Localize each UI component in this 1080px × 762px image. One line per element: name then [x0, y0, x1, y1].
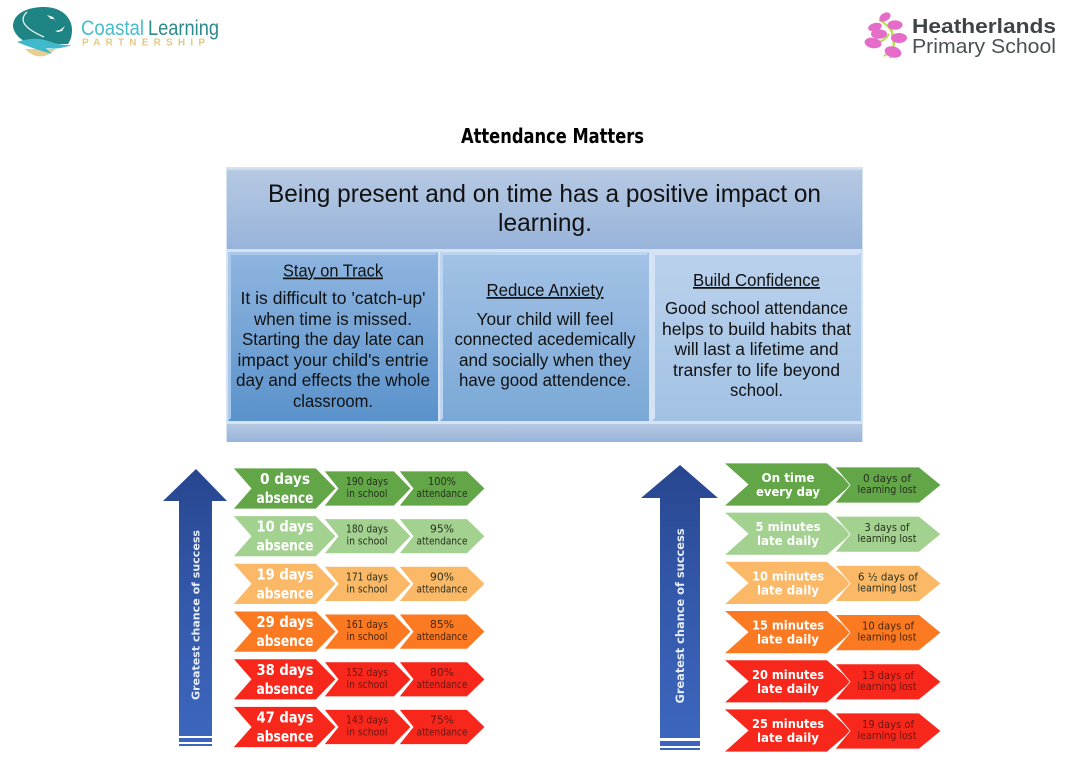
logo: Coastal Learning Partnership	[13, 7, 219, 56]
panel: Stay on Track	[228, 252, 438, 421]
panel: Reduce Anxiety: connected acedemically	[454, 329, 636, 349]
row: 25 minutes late daily	[724, 709, 941, 752]
panel: Build Confidence	[652, 252, 861, 421]
row: 10 days absence: in school	[346, 536, 388, 548]
row: 19 days absence	[233, 563, 485, 604]
row: 0 days absence	[233, 468, 485, 509]
panel heading	[227, 169, 862, 249]
row: 10 days absence: 10 days	[256, 518, 314, 536]
panel: Stay on Track: It is difficult to 'catch-up'	[240, 288, 426, 308]
row: 10 days absence: attendance	[416, 536, 468, 548]
row: 47 days absence: 47 days	[256, 708, 314, 726]
row: 29 days absence: 85%	[430, 619, 454, 631]
row: 25 minutes late daily: late daily	[757, 730, 819, 745]
row: 19 days absence: 90%	[430, 571, 454, 583]
logo: Coastal Learning Partnership: Learning	[148, 17, 219, 40]
row: 15 minutes late daily: late daily	[757, 632, 819, 647]
row: 38 days absence: 152 days	[346, 667, 388, 679]
row: 38 days absence: in school	[346, 679, 388, 691]
school name: Heatherlands	[912, 15, 1056, 38]
row: 25 minutes late daily: 19 days of	[862, 718, 915, 731]
row: 10 minutes late daily: 6 ½ days of	[858, 570, 919, 583]
row: 10 minutes late daily: late daily	[757, 582, 819, 597]
row: 10 days absence	[233, 516, 485, 557]
panel: Stay on Track: impact your child's entrie	[238, 350, 428, 370]
row: 19 days absence: in school	[346, 583, 388, 595]
row: on time every day: every day	[756, 484, 820, 499]
row: 0 days absence: absence	[256, 489, 314, 507]
row: 15 minutes late daily: 10 days of	[862, 620, 915, 633]
row: 29 days absence: attendance	[416, 631, 468, 643]
logo: Coastal Learning Partnership: PARTNERSHIP	[82, 38, 205, 48]
arrow: greatest chance of success (lateness): Greatest chance of success	[673, 528, 687, 704]
row: 38 days absence: attendance	[416, 679, 468, 691]
row: on time every day	[724, 463, 941, 506]
row: 10 minutes late daily	[724, 561, 941, 604]
row: 19 days absence: 19 days	[256, 565, 314, 583]
row: 19 days absence: absence	[256, 584, 314, 602]
logo: Heatherlands Primary School	[864, 11, 1056, 60]
panel footer bar	[227, 424, 862, 442]
panel: Stay on Track: Stay on Track	[283, 260, 383, 280]
arrow: greatest chance of success (lateness)	[641, 465, 718, 750]
row: 29 days absence: 161 days	[346, 619, 388, 631]
row: 47 days absence: 143 days	[346, 714, 388, 726]
title: Attendance Matters	[461, 124, 644, 148]
panel: Reduce Anxiety: and socially when they	[459, 350, 631, 370]
panel: Reduce Anxiety: Reduce Anxiety	[486, 280, 604, 300]
row: 25 minutes late daily: learning lost	[858, 729, 917, 742]
row: 0 days absence: in school	[346, 488, 388, 500]
panel: Build Confidence: transfer to life beyond	[673, 360, 840, 380]
row: on time every day: learning lost	[858, 483, 917, 496]
row: 20 minutes late daily: late daily	[757, 681, 819, 696]
row: 20 minutes late daily: 20 minutes	[752, 667, 824, 682]
panel: Stay on Track: Starting the day late can	[242, 329, 424, 349]
panel: Build Confidence: Build Confidence	[693, 270, 820, 290]
row: 29 days absence: 29 days	[256, 613, 314, 631]
icon: teal globe with waves and sand	[13, 7, 72, 56]
row: 5 minutes late daily: 3 days of	[864, 521, 910, 534]
row: on time every day: On time	[762, 470, 814, 485]
logo: Heatherlands Primary School: Primary School	[912, 36, 1056, 58]
panel: Reduce Anxiety: Your child will feel	[476, 309, 614, 329]
row: 38 days absence	[233, 659, 485, 700]
panel: Build Confidence: school.	[730, 380, 783, 400]
row: 5 minutes late daily: 5 minutes	[756, 519, 820, 534]
row: 5 minutes late daily: late daily	[757, 533, 819, 548]
row: 0 days absence: 100%	[428, 476, 456, 488]
row: 0 days absence: 190 days	[346, 476, 388, 488]
row: 15 minutes late daily: learning lost	[858, 631, 917, 644]
row: 0 days absence: 0 days	[260, 470, 310, 488]
panel heading: Being present and on time has a positive impact on	[268, 180, 821, 208]
row: 5 minutes late daily: learning lost	[858, 532, 917, 545]
chart: absence chevrons	[233, 468, 485, 748]
panel: Stay on Track: classroom.	[293, 391, 373, 411]
row: 29 days absence: in school	[346, 631, 388, 643]
panel: Build Confidence: helps to build habits that	[662, 319, 851, 339]
row: 38 days absence: absence	[256, 680, 314, 698]
arrow: greatest chance of success (absence)	[163, 469, 227, 746]
row: 47 days absence	[233, 706, 485, 748]
panel: Reduce Anxiety	[440, 252, 649, 421]
panel: Reduce Anxiety: have good attendence.	[459, 370, 631, 390]
panel: Stay on Track: day and effects the whole	[236, 370, 430, 390]
row: 29 days absence: absence	[256, 632, 314, 650]
row: 38 days absence: 80%	[430, 667, 454, 679]
logo wordmark: Coastal	[81, 17, 144, 40]
row: 20 minutes late daily: 13 days of	[862, 669, 915, 682]
row: 19 days absence: 171 days	[346, 571, 388, 583]
row: 47 days absence: 75%	[430, 714, 454, 726]
row: 47 days absence: absence	[256, 728, 314, 746]
row: 20 minutes late daily: learning lost	[858, 680, 917, 693]
row: 15 minutes late daily	[724, 611, 941, 654]
row: 19 days absence: attendance	[416, 583, 468, 595]
row: 10 minutes late daily: learning lost	[858, 581, 917, 594]
panel: Build Confidence: Good school attendance	[665, 298, 848, 318]
row: 25 minutes late daily: 25 minutes	[752, 716, 824, 731]
row: on time every day: 0 days of	[863, 472, 912, 485]
panel heading: learning.	[498, 209, 592, 237]
row: 10 days absence: absence	[256, 537, 314, 555]
row: 10 days absence: 95%	[430, 524, 454, 536]
row: 5 minutes late daily	[724, 512, 941, 555]
icon: pink heather flowers	[864, 11, 907, 60]
panel: Build Confidence: will last a lifetime and	[674, 339, 838, 359]
row: 15 minutes late daily: 15 minutes	[752, 618, 824, 633]
row: 10 minutes late daily: 10 minutes	[752, 568, 824, 583]
row: 47 days absence: in school	[346, 726, 388, 738]
row: 38 days absence: 38 days	[256, 661, 314, 679]
panel: attendance impact table	[226, 167, 863, 442]
row: 20 minutes late daily	[724, 660, 941, 703]
arrow: greatest chance of success (absence): Greatest chance of success	[190, 530, 202, 700]
row: 10 days absence: 180 days	[346, 524, 388, 536]
panel: Stay on Track: when time is missed.	[253, 309, 412, 329]
row: 29 days absence	[233, 611, 485, 652]
chart: lateness chevrons	[724, 463, 941, 752]
row: 47 days absence: attendance	[416, 726, 468, 738]
row: 0 days absence: attendance	[416, 488, 468, 500]
